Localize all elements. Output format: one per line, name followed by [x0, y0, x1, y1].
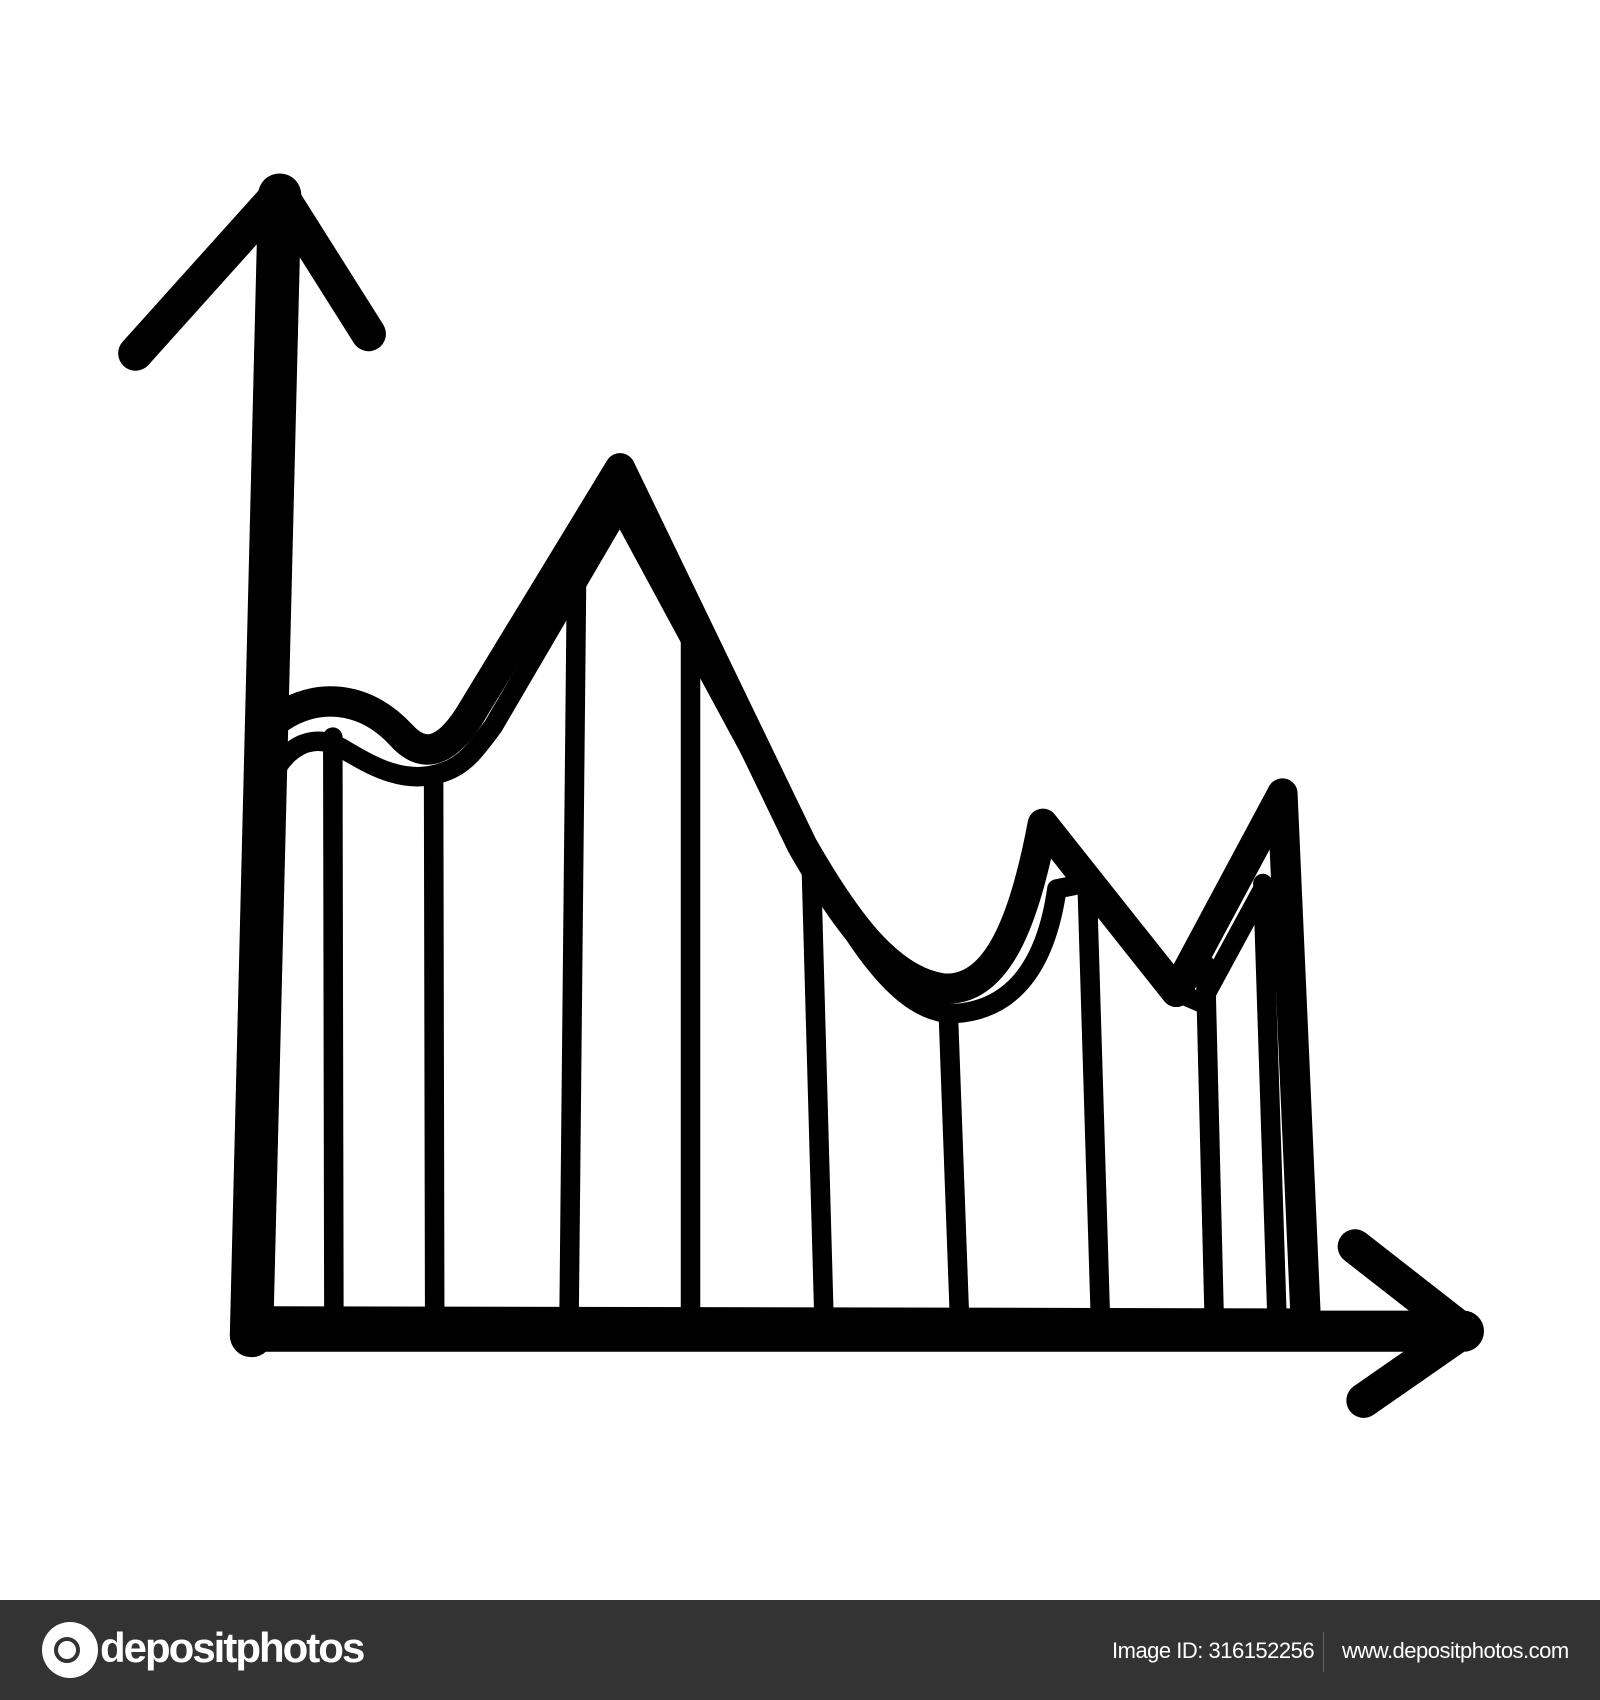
- inner baseline: [266, 1312, 1301, 1314]
- inner curve: [260, 509, 1263, 1014]
- website url: www.depositphotos.com: [1342, 1638, 1569, 1663]
- image id: Image ID: 316152256: [1112, 1638, 1314, 1663]
- footer bar: [0, 1600, 1600, 1700]
- main curve: [280, 468, 1306, 1331]
- y axis with arrow: [136, 193, 369, 1336]
- x axis with arrow: [251, 1247, 1463, 1401]
- vertical bars: [333, 564, 1277, 1317]
- logo text: depositphotos: [100, 1624, 363, 1671]
- logo icon: [42, 1622, 98, 1678]
